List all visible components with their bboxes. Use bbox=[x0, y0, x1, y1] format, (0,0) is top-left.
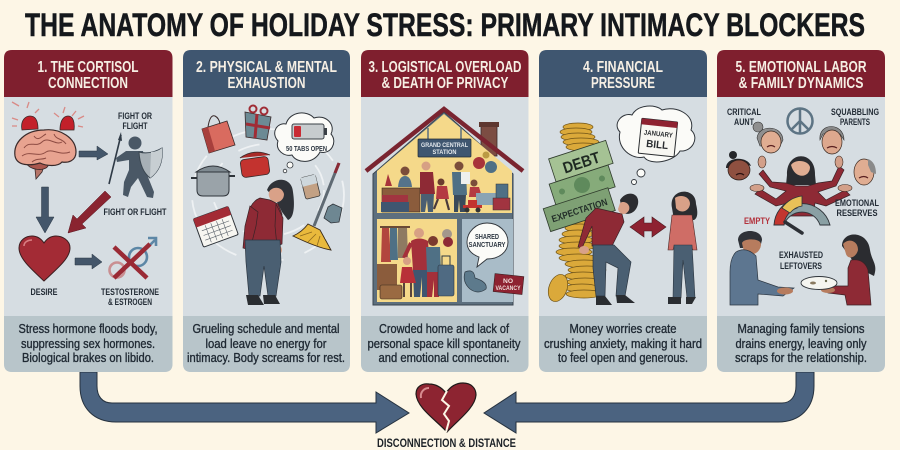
label: emotional reserves: EMOTIONAL bbox=[835, 198, 880, 208]
ornaments bbox=[473, 152, 497, 173]
callout: thought bubble with battery: 50 TABS OPEN bbox=[286, 146, 327, 153]
header: panel 2: EXHAUSTION bbox=[228, 75, 306, 92]
label: testosterone and estrogen: TESTOSTERONE bbox=[101, 287, 159, 297]
callout: thought bubble with january bill bbox=[617, 106, 695, 184]
label: disconnection and distance: DISCONNECTION & DISTANCE bbox=[377, 438, 516, 450]
footer: panel 1 bbox=[4, 316, 172, 372]
header: panel 4 bbox=[539, 50, 707, 97]
icon: arguing relative face left bbox=[726, 151, 751, 180]
label: empty: EMPTY bbox=[744, 216, 771, 227]
swirl lines bbox=[192, 129, 344, 261]
footer: panel 1: suppressing sex hormones. bbox=[21, 336, 155, 351]
arrow: left flow to broken heart bbox=[80, 372, 409, 433]
icon: pillow in sanctuary bbox=[464, 271, 486, 292]
icon: red pot bbox=[240, 152, 270, 178]
panel: 1 the cortisol connection bbox=[4, 50, 172, 372]
header: panel 1 bbox=[4, 50, 172, 97]
arrow: brain to figure bbox=[79, 146, 108, 160]
top floor people and luggage bbox=[381, 162, 510, 212]
icon: peace sign bbox=[788, 108, 812, 134]
footer: panel 5 bbox=[717, 316, 885, 372]
callout: shared sanctuary: SANCTUARY bbox=[468, 242, 506, 249]
icon: plate of scraps bbox=[801, 276, 837, 290]
header: panel 3 bbox=[361, 50, 528, 97]
icon: crowded house bbox=[366, 109, 524, 305]
label: fight or flight top: FIGHT OR bbox=[118, 111, 153, 121]
callout: thought bubble with january bill: BILL bbox=[646, 138, 669, 152]
icon: partner standing bbox=[668, 192, 697, 304]
label: critical aunt bbox=[727, 107, 762, 127]
header: panel 5 bbox=[717, 50, 885, 97]
icon: broom bbox=[293, 163, 339, 250]
icon: shopping bag bbox=[202, 116, 235, 153]
sign: grand central station bbox=[418, 139, 471, 157]
icon: heart desire bbox=[19, 236, 70, 281]
footer: panel 3: Crowded home and lack of bbox=[379, 321, 509, 336]
icon: debt and expectation bills: EXPECTATION bbox=[550, 197, 609, 225]
footer: panel 5: drains energy, leaving only bbox=[736, 336, 867, 351]
header: panel 2: 2. PHYSICAL & MENTAL bbox=[196, 59, 337, 76]
icon: stack of coins bbox=[545, 123, 606, 304]
panel: 2 physical and mental exhaustion bbox=[183, 50, 350, 372]
arrow: double headed between partners bbox=[630, 217, 666, 237]
callout: thought bubble with battery bbox=[275, 113, 334, 173]
label: fight or flight lower: FIGHT OR FLIGHT bbox=[104, 207, 167, 217]
sign: no vacancy: VACANCY bbox=[496, 286, 520, 292]
icon: critical aunt face bbox=[753, 122, 783, 153]
footer: panel 2: load leave no energy for bbox=[206, 336, 327, 351]
label: critical aunt: CRITICAL bbox=[727, 107, 762, 117]
sign: grand central station: GRAND CENTRAL bbox=[421, 143, 468, 149]
label: squabbling parents bbox=[831, 107, 879, 127]
panel: 4 financial pressure bbox=[539, 50, 707, 372]
callout: shared sanctuary: SHARED bbox=[475, 234, 499, 241]
footer: panel 1: Stress hormone floods body, bbox=[18, 321, 158, 336]
icon: salt shaker bbox=[324, 204, 342, 223]
label: desire: DESIRE bbox=[30, 287, 58, 297]
panel: 3 logistical overload bbox=[361, 50, 528, 372]
label: testosterone and estrogen: & ESTROGEN bbox=[108, 297, 152, 307]
footer: panel 2: Grueling schedule and mental bbox=[192, 321, 340, 336]
footer: panel 4: crushing anxiety, making it hard bbox=[544, 336, 702, 351]
header: panel 3: 3. LOGISTICAL OVERLOAD bbox=[368, 59, 522, 76]
icon: squabbling parent face bbox=[820, 126, 844, 154]
arrow: figure to heart bbox=[68, 191, 111, 233]
callout: shared sanctuary bbox=[467, 223, 508, 267]
icon: jar bbox=[301, 174, 320, 199]
label: exhausted leftovers: EXHAUSTED bbox=[779, 250, 823, 260]
header: panel 5: 5. EMOTIONAL LABOR bbox=[736, 59, 866, 76]
header: panel 1: CONNECTION bbox=[48, 75, 128, 92]
label: squabbling parents: PARENTS bbox=[840, 117, 870, 127]
sign: no vacancy: NO bbox=[503, 279, 513, 285]
icon: figure with spear and shield bbox=[109, 132, 162, 198]
footer: panel 4: Money worries create bbox=[570, 321, 676, 336]
icon: arguing relative face right bbox=[854, 159, 876, 185]
footer: panel 2: intimacy. Body screams for rest. bbox=[187, 350, 345, 365]
footer: panel 5: scraps for the relationship. bbox=[735, 350, 867, 365]
footer: panel 3: and emotional connection. bbox=[378, 350, 510, 365]
label: testosterone and estrogen bbox=[101, 287, 159, 307]
icon: gift bbox=[245, 106, 271, 140]
arrow: brain to heart bbox=[36, 187, 54, 233]
label: emotional reserves: RESERVES bbox=[836, 208, 878, 218]
icon: partner receiving leftovers bbox=[730, 231, 794, 305]
footer: panel 3: personal space kill spontaneity bbox=[368, 336, 521, 351]
sign: grand central station: STATION bbox=[432, 150, 456, 156]
header: panel 1: 1. THE CORTISOL bbox=[38, 59, 138, 76]
icon: debt and expectation bills: DEBT bbox=[561, 149, 603, 177]
icon: exhausted woman bbox=[243, 180, 294, 305]
footer: panel 4 bbox=[539, 316, 707, 372]
arrow: right flow to broken heart bbox=[484, 372, 814, 433]
icon: debt and expectation bills bbox=[543, 140, 615, 232]
icon: broken heart bbox=[416, 383, 476, 432]
label: fight or flight top bbox=[118, 111, 153, 131]
footer: panel 1: Biological brakes on libido. bbox=[22, 350, 154, 365]
panel: 5 emotional labor bbox=[717, 50, 885, 372]
icon: grey pot bbox=[191, 166, 235, 196]
label: exhausted leftovers bbox=[779, 250, 823, 271]
label: fight or flight top: FLIGHT bbox=[122, 121, 148, 131]
icon: brain with alarm sirens bbox=[12, 102, 84, 179]
label: squabbling parents: SQUABBLING bbox=[831, 107, 879, 117]
header: panel 3: & DEATH OF PRIVACY bbox=[382, 75, 509, 92]
footer: panel 5: Managing family tensions bbox=[738, 321, 864, 336]
label: critical aunt: AUNT bbox=[734, 117, 755, 127]
footer: panel 2 bbox=[183, 316, 350, 372]
header: panel 5: & FAMILY DYNAMICS bbox=[738, 75, 864, 92]
icon: emotional reserves gauge bbox=[774, 196, 830, 233]
arrow: heart to hormones bbox=[75, 254, 102, 269]
icon: calendar bbox=[193, 206, 238, 247]
callout: thought bubble with january bill: JANUARY bbox=[643, 130, 673, 140]
label: exhausted leftovers: LEFTOVERS bbox=[780, 261, 822, 271]
icon: crossed out hormone symbols bbox=[110, 238, 156, 278]
icon: man crushed under weight bbox=[578, 194, 638, 305]
header: panel 4: 4. FINANCIAL bbox=[583, 59, 663, 76]
label: emotional reserves bbox=[835, 198, 880, 218]
sign: no vacancy bbox=[493, 274, 524, 295]
footer: panel 3 bbox=[361, 316, 528, 372]
header: panel 2 bbox=[183, 50, 350, 97]
icon: stressed woman with many arms bbox=[750, 156, 852, 216]
header: panel 4: PRESSURE bbox=[591, 75, 655, 92]
chimney bbox=[479, 122, 499, 156]
icon: partner holding plate bbox=[821, 234, 875, 305]
footer: panel 4: to feel open and generous. bbox=[558, 350, 688, 365]
lower left room people and luggage bbox=[377, 226, 454, 299]
